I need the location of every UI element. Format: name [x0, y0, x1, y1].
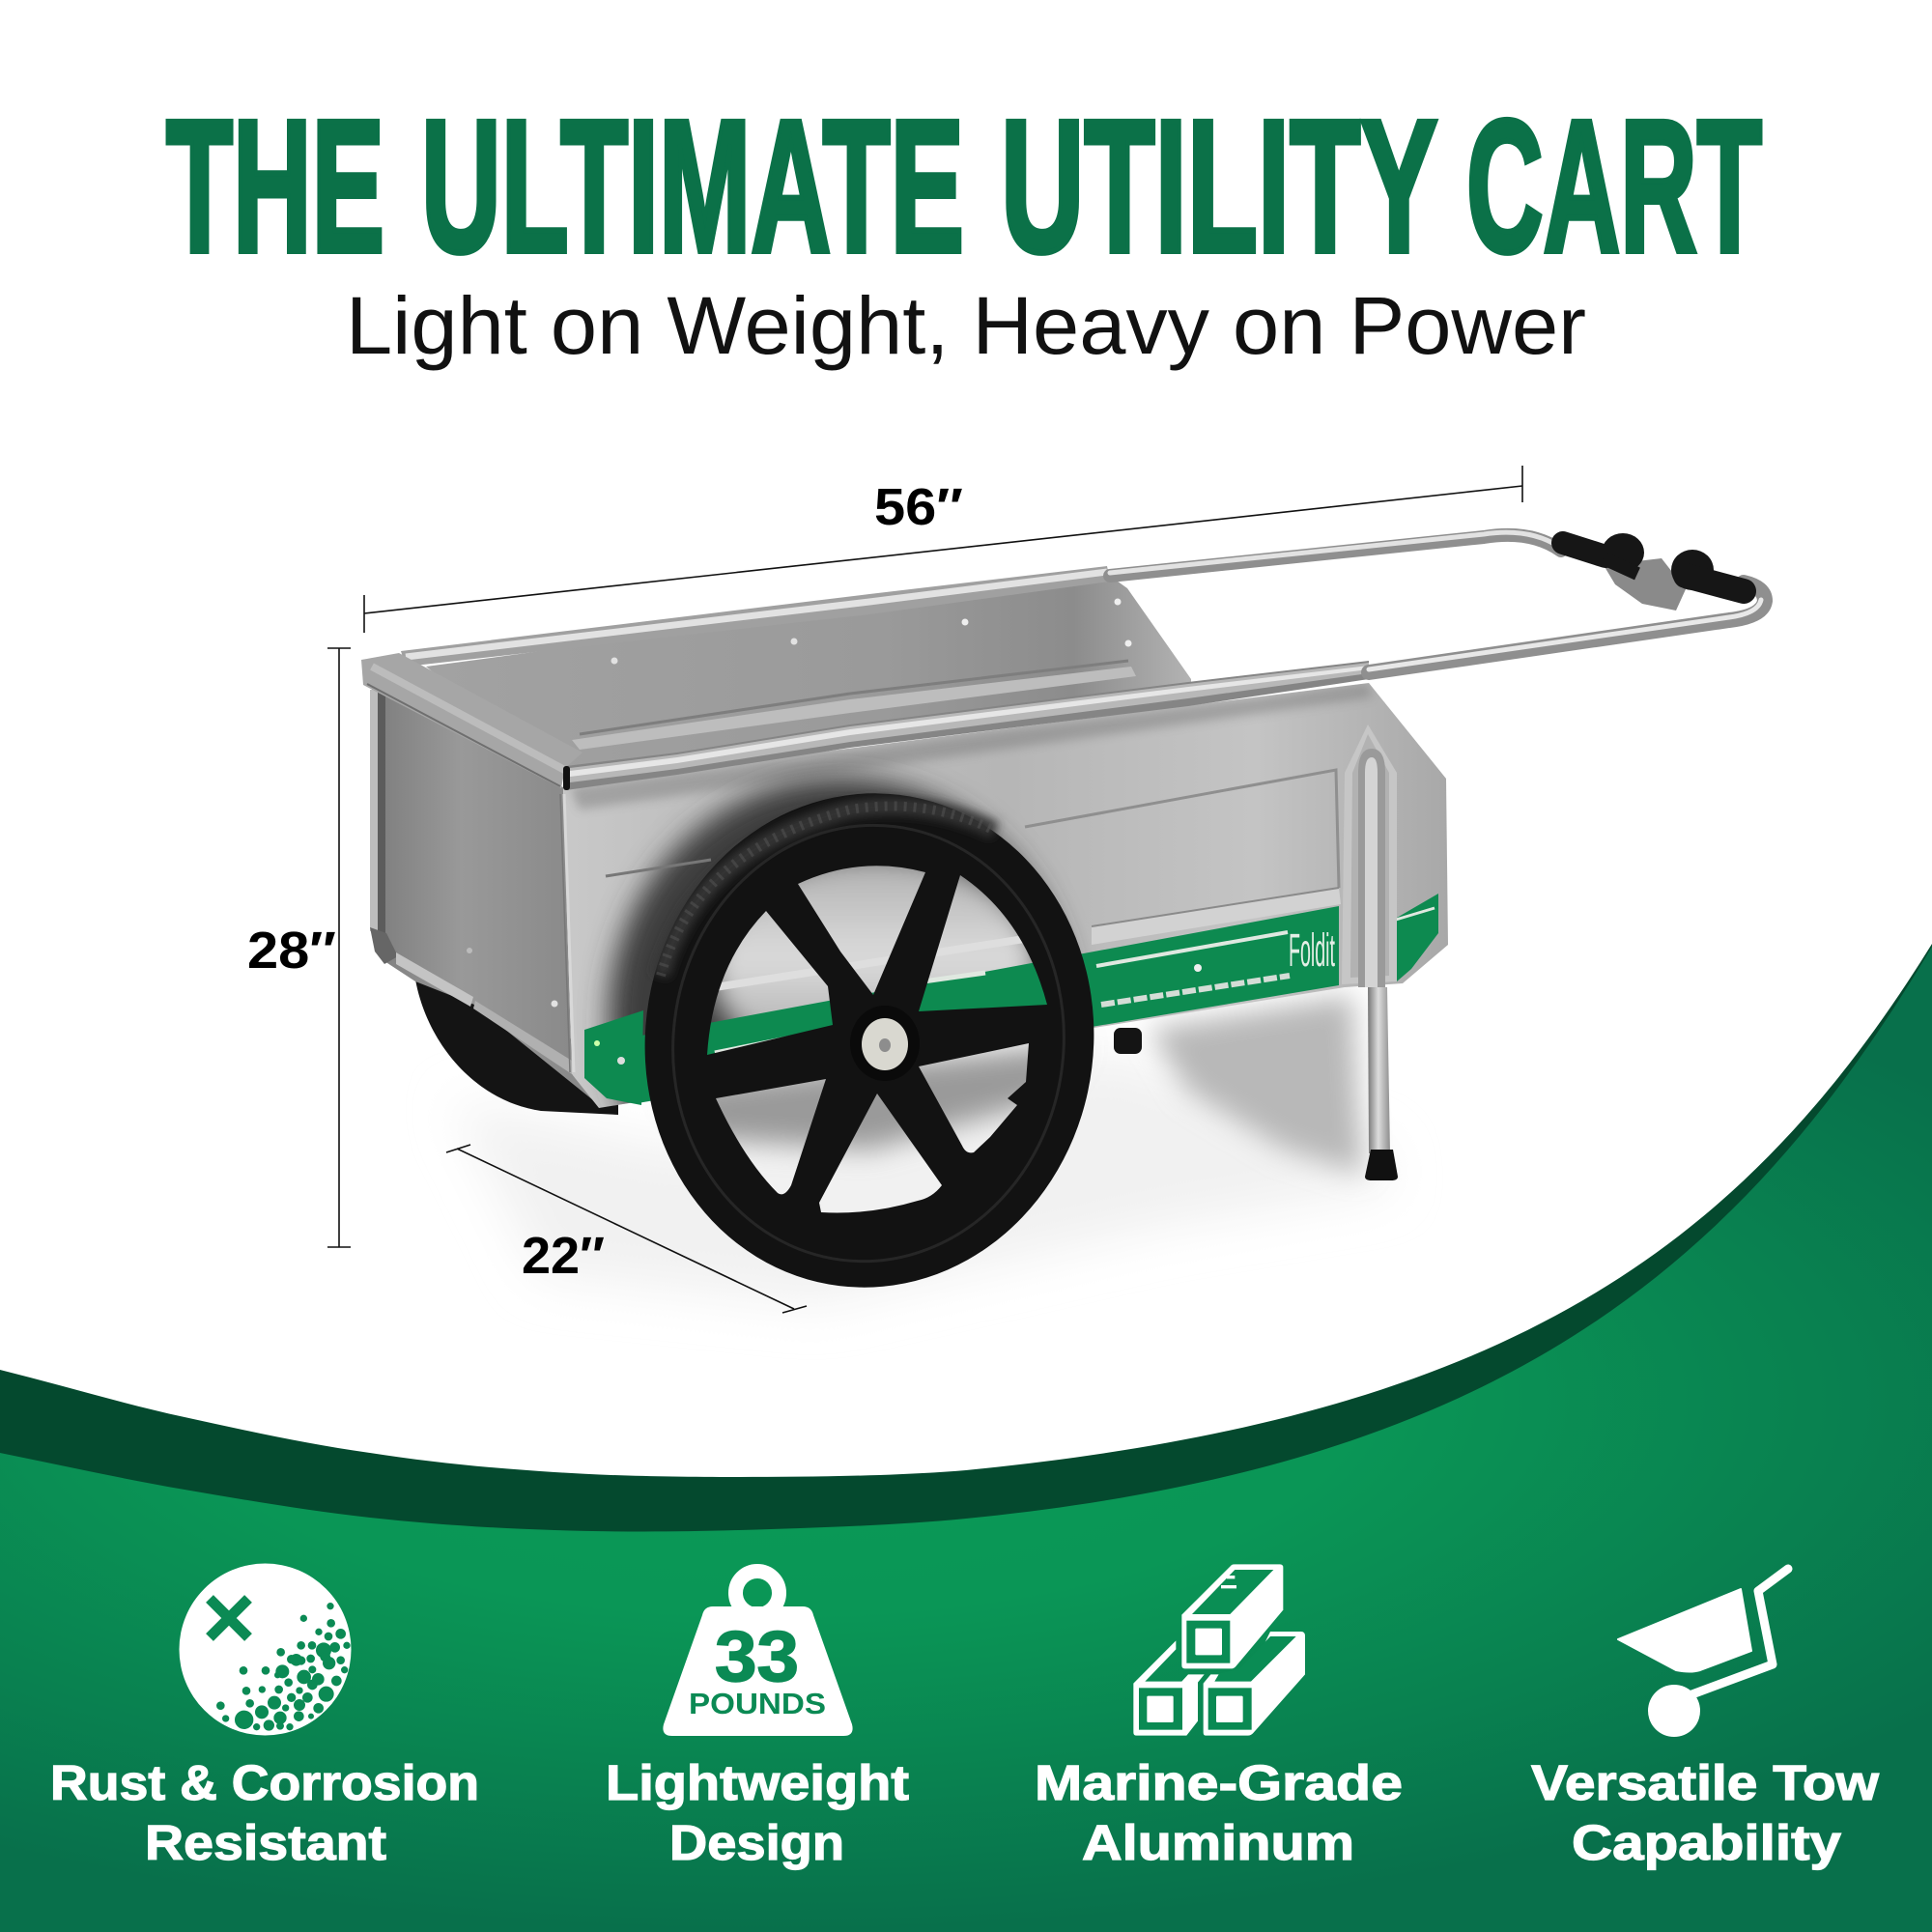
bottom left tube — [1133, 1640, 1205, 1736]
ground shadow — [454, 995, 1391, 1304]
wheel well shadow — [569, 683, 1373, 1107]
label: Design — [669, 1815, 844, 1870]
front wheel — [645, 793, 1094, 1288]
dimension: length 56 in — [364, 466, 1522, 633]
back handle tube — [1110, 532, 1561, 576]
bottom right tube — [1204, 1632, 1305, 1736]
cart interior back panel — [426, 574, 1191, 778]
cart long side panel — [563, 683, 1448, 1108]
small under-body foot — [1114, 1028, 1142, 1054]
icon: wheelbarrow — [1618, 1569, 1788, 1737]
front handle tube and bend — [1369, 582, 1765, 672]
top tube — [1181, 1564, 1283, 1668]
cart product illustration — [361, 532, 1765, 1304]
label: Rust & Corrosion — [50, 1755, 479, 1810]
left pillar and seams — [370, 690, 574, 1074]
label: Resistant — [145, 1815, 386, 1870]
feature: rust and corrosion resistant — [50, 1563, 479, 1870]
title: UTILITY — [1001, 81, 1435, 292]
kickstand bracket — [1342, 724, 1397, 987]
feature: marine-grade aluminum — [1035, 1564, 1403, 1870]
feature: versatile tow capability — [1531, 1569, 1879, 1870]
icon: aluminum tube stack — [1133, 1564, 1305, 1736]
dimension: height 28 in: 28″ — [247, 922, 336, 980]
rear wheel — [415, 980, 618, 1115]
back rail — [401, 566, 1110, 667]
icon: 33 pound weight: POUNDS — [689, 1687, 826, 1720]
dimension: width 22 in: 22″ — [522, 1227, 605, 1285]
wheel hub — [850, 1006, 920, 1081]
label: Aluminum — [1082, 1815, 1354, 1870]
feature: lightweight design — [606, 1571, 909, 1870]
icon: 33 pound weight — [663, 1571, 853, 1736]
label: Capability — [1572, 1815, 1842, 1870]
title: ULTIMATE — [421, 81, 964, 292]
dimension: length 56 in: 56″ — [874, 478, 963, 536]
green stripe band — [584, 894, 1438, 1105]
label: Versatile Tow — [1531, 1755, 1879, 1810]
side panel ribs — [606, 770, 1341, 987]
icon: 33 pound weight: 33 — [715, 1616, 799, 1696]
kickstand leg — [1368, 987, 1390, 1153]
title: THE — [166, 81, 384, 292]
cart left end panel — [372, 688, 598, 1104]
front rail — [563, 661, 1369, 790]
kickstand foot — [1365, 1150, 1398, 1180]
label: Marine-Grade — [1035, 1755, 1403, 1810]
subtitle: Light on Weight, Heavy on Power — [346, 280, 1586, 371]
green stripe band: Foldit — [1289, 925, 1335, 977]
dimension: width 22 in — [446, 1145, 807, 1313]
icon: corroded circle — [180, 1563, 352, 1735]
label: Lightweight — [606, 1755, 909, 1810]
green curved footer panel — [0, 944, 1932, 1932]
handle grips — [1563, 533, 1744, 611]
left end rim — [361, 653, 582, 788]
